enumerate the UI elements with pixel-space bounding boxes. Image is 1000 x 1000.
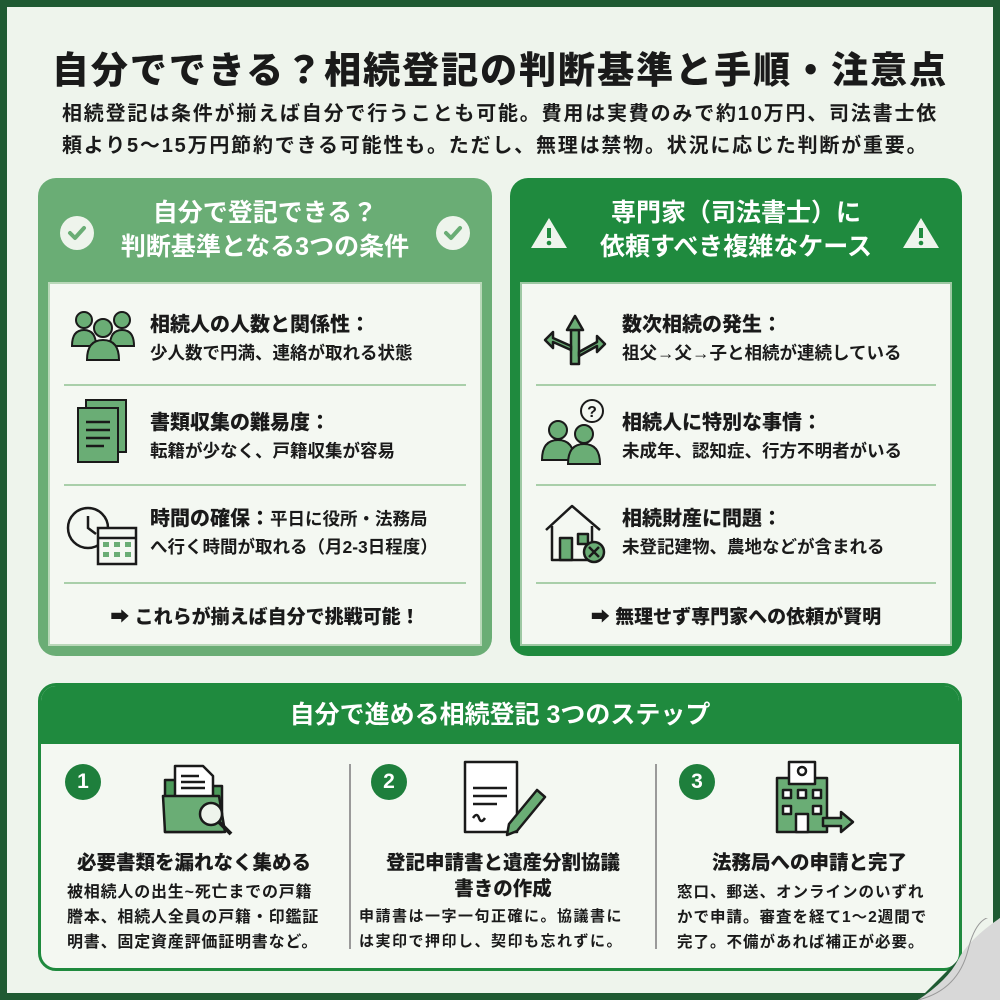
item: property issues <box>545 504 884 564</box>
step 1 title: 必要書類を漏れなく集める <box>77 852 311 874</box>
panel: self-registration conditions <box>38 178 492 656</box>
step 2 title <box>386 852 620 900</box>
item: documents: 書類収集の難易度： <box>150 412 330 434</box>
item: time <box>66 506 438 566</box>
item: special circumstances: 相続人に特別な事情： <box>622 412 822 434</box>
icon: check right <box>436 216 470 250</box>
icon: document with pen <box>464 760 546 836</box>
number 1 <box>65 764 101 800</box>
item: heirs <box>71 311 412 363</box>
item: time: へ行く時間が取れる（月2-3日程度） <box>150 537 438 557</box>
heading: left panel: 自分で登記できる？ <box>153 199 377 227</box>
panel: expert cases <box>510 178 962 656</box>
icon: people <box>71 311 135 361</box>
subtitle <box>62 102 938 157</box>
step 3 <box>677 760 927 951</box>
step 3 desc: 窓口、郵送、オンラインのいずれ <box>677 884 925 901</box>
step 2 title: 書きの作成 <box>454 878 552 900</box>
decorative page curl <box>918 918 1000 1000</box>
step 2 title: 登記申請書と遺産分割協議 <box>386 852 620 874</box>
number 2: 2 <box>383 770 395 793</box>
step 3 desc <box>677 884 927 951</box>
inner box: conditions <box>48 282 482 646</box>
icon: house with x <box>545 504 606 564</box>
number 2 <box>371 764 407 800</box>
step 3 desc: 完了。不備があれば補正が必要。 <box>677 934 925 951</box>
step 2 desc: 申請書は一字一句正確に。協議書に <box>359 908 623 925</box>
item: special circumstances: 未成年、認知症、行方不明者がいる <box>622 441 902 461</box>
panel: three steps <box>38 683 962 971</box>
heading: steps: 自分で進める相続登記 3つのステップ <box>290 701 710 729</box>
icon: building with arrow <box>776 760 854 834</box>
title: 自分でできる？相続登記の判断基準と手順・注意点 <box>52 50 948 91</box>
icon: warning left <box>531 218 567 248</box>
icon: clock and calendar <box>66 506 138 566</box>
step 1 desc: 被相続人の出生~死亡までの戸籍 <box>67 884 312 901</box>
step 1 desc <box>67 883 319 951</box>
item: property issues: 未登記建物、農地などが含まれる <box>622 537 884 557</box>
item: property issues: 相続財産に問題： <box>622 508 782 530</box>
step 3 title: 法務局への申請と完了 <box>712 852 907 874</box>
subtitle: 相続登記は条件が揃えば自分で行うことも可能。費用は実費のみで約10万円、司法書士依 <box>62 103 938 125</box>
step 2 desc <box>359 908 623 950</box>
icon: people with question <box>541 399 604 465</box>
heading: right panel: 依頼すべき複雑なケース <box>600 233 872 261</box>
icon: folder with magnifier <box>162 764 232 836</box>
heading: left panel <box>121 199 409 261</box>
item: special circumstances <box>541 399 902 465</box>
item: successive inheritance <box>544 314 901 366</box>
item: successive inheritance: 祖父→父→子と相続が連続している <box>622 343 901 363</box>
heading: right panel: 専門家（司法書士）に <box>611 199 861 227</box>
inner box: cases <box>520 282 952 646</box>
heading: steps <box>41 686 959 744</box>
icon: check left <box>60 216 94 250</box>
heading: right panel <box>600 199 872 261</box>
number 3 <box>679 764 715 800</box>
item: documents <box>77 399 395 463</box>
heading: left panel: 判断基準となる3つの条件 <box>121 233 409 261</box>
item: time: 時間の確保：平日に役所・法務局 <box>150 508 428 530</box>
step 1 desc: 謄本、相続人全員の戸籍・印鑑証 <box>67 909 319 926</box>
step 3 desc: かで申請。審査を経て1～2週間で <box>677 909 927 926</box>
step 1 desc: 明書、固定資産評価証明書など。 <box>67 934 318 951</box>
step 1 <box>65 764 319 951</box>
icon: branching arrows <box>544 314 606 366</box>
footer: right conclusion: ➡ 無理せず専門家への依頼が賢明 <box>591 607 881 628</box>
item: documents: 転籍が少なく、戸籍収集が容易 <box>150 441 395 461</box>
item: heirs: 少人数で円満、連絡が取れる状態 <box>150 343 412 363</box>
item: heirs: 相続人の人数と関係性： <box>150 314 370 336</box>
number 1: 1 <box>77 770 89 793</box>
icon: documents <box>77 399 127 463</box>
step 2 desc: は実印で押印し、契印も忘れずに。 <box>359 933 623 950</box>
step 2 <box>359 760 623 950</box>
subtitle: 頼より5～15万円節約できる可能性も。ただし、無理は禁物。状況に応じた判断が重要。 <box>62 135 928 157</box>
item: successive inheritance: 数次相続の発生： <box>622 314 782 336</box>
number 3: 3 <box>691 770 703 793</box>
footer: left conclusion: ➡ これらが揃えば自分で挑戦可能！ <box>110 607 420 628</box>
icon: people with question: ? <box>587 404 597 421</box>
icon: warning right <box>903 218 939 248</box>
